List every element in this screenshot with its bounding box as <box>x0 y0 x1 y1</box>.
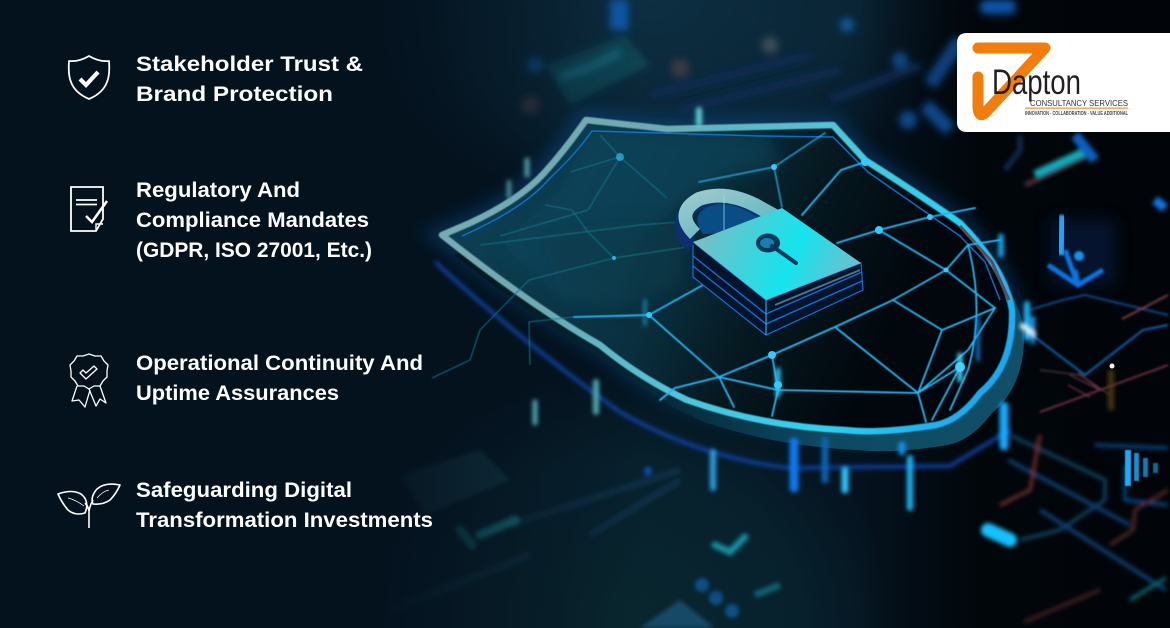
heading: regulatory compliance: Compliance Mandates <box>136 209 369 232</box>
shield: 3D lower rim <box>454 140 1024 451</box>
network: faint teal lines <box>432 135 687 378</box>
heading: regulatory compliance: (GDPR, ISO 27001, Etc.) <box>136 239 372 262</box>
item: stakeholder trust <box>69 53 363 106</box>
padlock: body side <box>693 242 863 335</box>
logo card <box>957 33 1170 132</box>
shield: inner face <box>442 120 1012 431</box>
item: digital transformation <box>58 479 433 532</box>
item: regulatory compliance <box>71 179 372 262</box>
heading: digital transformation: Safeguarding Digital <box>136 479 352 502</box>
padlock: shackle <box>681 200 777 246</box>
logo: subtitle: CONSULTANCY SERVICES <box>1030 98 1128 108</box>
glow bars around the shield <box>509 110 1034 540</box>
padlock: top face <box>693 208 861 300</box>
heading: operational continuity: Operational Continuity And <box>136 352 423 375</box>
icon: sprout <box>58 484 120 528</box>
heading: stakeholder trust: Brand Protection <box>136 83 333 106</box>
heading: digital transformation: Transformation Investments <box>136 509 433 532</box>
icon: glowing signal bars <box>1125 450 1158 486</box>
icon: shield with check <box>69 56 109 99</box>
network: glowing nodes <box>612 153 965 389</box>
logo: orange mark <box>978 48 1045 115</box>
shield: outer glow <box>442 120 1012 431</box>
icon: award badge <box>70 354 108 407</box>
heading: regulatory compliance: Regulatory And <box>136 179 300 202</box>
icon: document with check <box>71 187 107 231</box>
illustration: security shield <box>432 110 1034 540</box>
logo: wordmark: Dapton <box>992 63 1081 102</box>
heading: stakeholder trust: Stakeholder Trust & <box>136 53 363 76</box>
logo: tagline: INNOVATION - COLLABORATION - VALUE ADDITIONAL <box>1025 111 1129 117</box>
shield: bright border <box>442 120 1012 431</box>
item: operational continuity <box>70 352 423 407</box>
padlock <box>681 196 863 335</box>
heading: operational continuity: Uptime Assurances <box>136 382 339 405</box>
background: right side circuit traces <box>1000 135 1168 622</box>
padlock: keyhole <box>756 234 796 263</box>
network: bright blue lines <box>574 133 1000 422</box>
